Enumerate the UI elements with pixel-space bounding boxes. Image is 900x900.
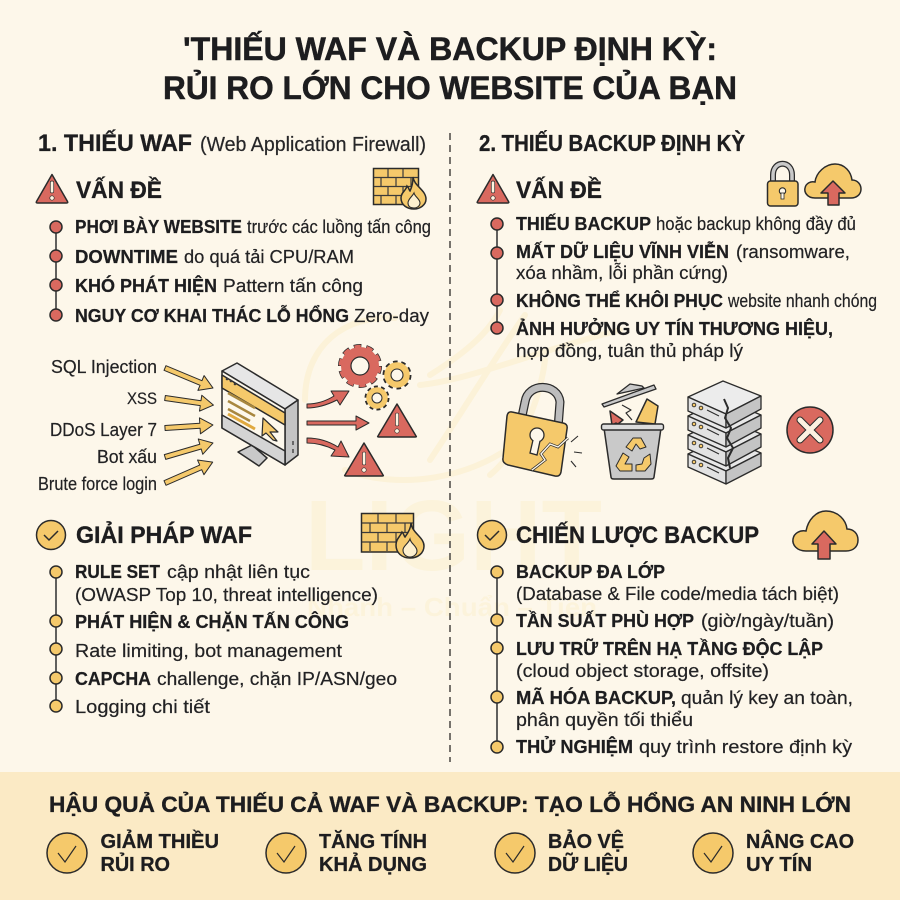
heading: WAF solution: GIẢI PHÁP WAF	[76, 520, 252, 549]
bullet list: problems WAF: NGUY CƠ KHAI THÁC LỖ HỔNG	[75, 305, 349, 326]
bullet list: problems WAF: Pattern tấn công	[223, 275, 363, 296]
bullet list: WAF solutions: CAPCHA	[75, 669, 151, 689]
benefit: data protection	[495, 829, 628, 876]
bullet list: backup strategy: quản lý key an toàn,	[681, 687, 853, 708]
bullet list: backup problems: hợp đồng, tuân thủ pháp lý	[516, 340, 744, 361]
icon: cloud upload top	[805, 164, 861, 205]
heading: section 1	[38, 129, 426, 157]
footer heading: HẬU QUẢ CỦA THIẾU CẢ WAF VÀ BACKUP: TẠO LỖ HỔNG AN NINH LỚN	[49, 791, 851, 817]
bullet list: problems WAF: PHƠI BÀY WEBSITE	[75, 216, 242, 237]
heading: problem left: VẤN ĐỀ	[76, 176, 162, 204]
bullet list: backup strategy: phân quyền tối thiểu	[516, 709, 693, 730]
attack type labels: SQL Injection	[51, 356, 157, 377]
title	[163, 30, 737, 106]
bullet list: WAF solutions: cập nhật liên tục	[167, 561, 310, 582]
heading: section 1: 1. THIẾU WAF	[38, 129, 192, 157]
icon: cloud upload strategy	[793, 511, 858, 559]
icon: firewall solution	[362, 514, 424, 558]
bullet list: backup strategy: TẦN SUẤT PHÙ HỢP	[516, 610, 694, 631]
icon: small gold gear	[367, 388, 387, 408]
icon: firewall left	[374, 168, 426, 209]
icon: large red gear	[342, 348, 378, 384]
bullet list: backup strategy: LƯU TRỮ TRÊN HẠ TẦNG ĐỘC LẬP	[516, 638, 823, 659]
bullet list: backup problems: (ransomware,	[736, 241, 850, 262]
watermark logo and wordmark: LIGHT	[305, 480, 602, 592]
attack type labels: DDoS Layer 7	[50, 419, 157, 440]
bullet list: problems WAF: do quá tải CPU/RAM	[184, 246, 354, 267]
icon: check badge backup	[478, 520, 506, 550]
bullet list: backup problems: ẢNH HƯỞNG UY TÍN THƯƠNG HIỆU,	[516, 318, 833, 339]
bullet list: problems WAF: Zero-day	[354, 305, 430, 326]
bullet list: backup problems: website nhanh chóng	[727, 290, 877, 311]
benefit: data protection: BẢO VỆ	[548, 829, 624, 853]
heading: section 2: 2. THIẾU BACKUP ĐỊNH KỲ	[479, 129, 745, 156]
heading: backup strategy: CHIẾN LƯỢC BACKUP	[516, 521, 759, 549]
attack type labels: XSS	[127, 389, 157, 408]
attack type labels: Brute force login	[38, 473, 157, 494]
benefit: reputation: UY TÍN	[746, 853, 812, 876]
panel: consequences footer	[0, 772, 900, 900]
bullet list: WAF solutions	[50, 561, 397, 717]
icon: warning lower	[345, 443, 383, 476]
bullet list: WAF solutions: Rate limiting, bot management	[75, 640, 342, 661]
bullet list: backup problems	[491, 213, 877, 361]
icon: check badge WAF	[36, 520, 66, 550]
impact arrows	[307, 391, 369, 457]
bullet list: problems WAF	[50, 216, 431, 326]
benefit: availability: TĂNG TÍNH	[319, 830, 427, 853]
bullet list: WAF solutions: PHÁT HIỆN & CHẶN TẤN CÔNG	[75, 611, 349, 632]
bullet list: backup strategy: (giờ/ngày/tuần)	[701, 610, 834, 631]
attack arrows	[162, 361, 216, 490]
title: RỦI RO LỚN CHO WEBSITE CỦA BẠN	[163, 69, 737, 106]
bullet list: problems WAF: trước các luồng tấn công	[247, 216, 431, 237]
watermark logo and wordmark: Nhanh – Chuẩn – Tiện	[307, 592, 597, 622]
benefit: availability: KHẢ DỤNG	[319, 853, 427, 876]
icon: warning triangle	[36, 174, 68, 203]
bullet list: backup strategy: quy trình restore định kỳ	[639, 736, 853, 757]
bullet list: problems WAF: KHÓ PHÁT HIỆN	[75, 275, 217, 296]
icon: cracked server stack	[688, 381, 761, 484]
icon: padlock	[768, 164, 798, 206]
benefit: reduce risk: RỦI RO	[100, 852, 170, 876]
bullet list: backup problems: xóa nhầm, lỗi phần cứng)	[516, 262, 728, 283]
bullet list: backup strategy: MÃ HÓA BACKUP,	[516, 687, 676, 708]
benefit: reduce risk: GIẢM THIỀU	[100, 830, 219, 853]
icon: red X circle	[787, 407, 833, 453]
benefit: reputation: NÂNG CAO	[746, 829, 854, 853]
benefit: availability	[266, 830, 427, 876]
bullet list: WAF solutions: RULE SET	[75, 562, 160, 582]
bullet list: backup problems: KHÔNG THỂ KHÔI PHỤC	[516, 290, 723, 311]
bullet list: WAF solutions: Logging chi tiết	[75, 696, 210, 717]
heading: section 1: (Web Application Firewall)	[200, 134, 426, 156]
benefit: reputation	[693, 829, 854, 876]
icon: trash bin	[602, 384, 664, 479]
bullet list: backup strategy: THỬ NGHIỆM	[516, 736, 633, 757]
bullet list: backup problems: MẤT DỮ LIỆU VĨNH VIỄN	[516, 241, 729, 262]
bullet list: WAF solutions: (OWASP Top 10, threat intelligence)	[75, 584, 378, 605]
watermark logo and wordmark	[305, 310, 620, 622]
bullet list: backup problems: THIẾU BACKUP	[516, 213, 651, 234]
icon: broken padlock	[503, 387, 582, 476]
bullet list: backup strategy: (Database & File code/media tách biệt)	[516, 583, 839, 604]
bullet list: backup strategy: BACKUP ĐA LỚP	[516, 561, 665, 582]
heading: problem right: VẤN ĐỀ	[516, 176, 602, 204]
benefit: data protection: DỮ LIỆU	[548, 852, 628, 876]
icon: gold gear	[386, 364, 408, 386]
bullet list: backup problems: hoặc backup không đầy đủ	[656, 213, 856, 234]
icon: warning triangle right	[477, 174, 509, 203]
icon: warning upper	[378, 404, 416, 437]
attack type labels	[38, 356, 157, 494]
bullet list: backup strategy	[491, 561, 853, 757]
bullet list: problems WAF: DOWNTIME	[75, 247, 178, 267]
icon: computer monitor	[222, 363, 298, 466]
benefit: reduce risk	[47, 830, 219, 876]
title: 'THIẾU WAF VÀ BACKUP ĐỊNH KỲ:	[183, 30, 717, 67]
attack type labels: Bot xấu	[97, 446, 157, 467]
bullet list: WAF solutions: challenge, chặn IP/ASN/geo	[157, 668, 397, 689]
bullet list: backup strategy: (cloud object storage, offsite)	[516, 660, 769, 681]
